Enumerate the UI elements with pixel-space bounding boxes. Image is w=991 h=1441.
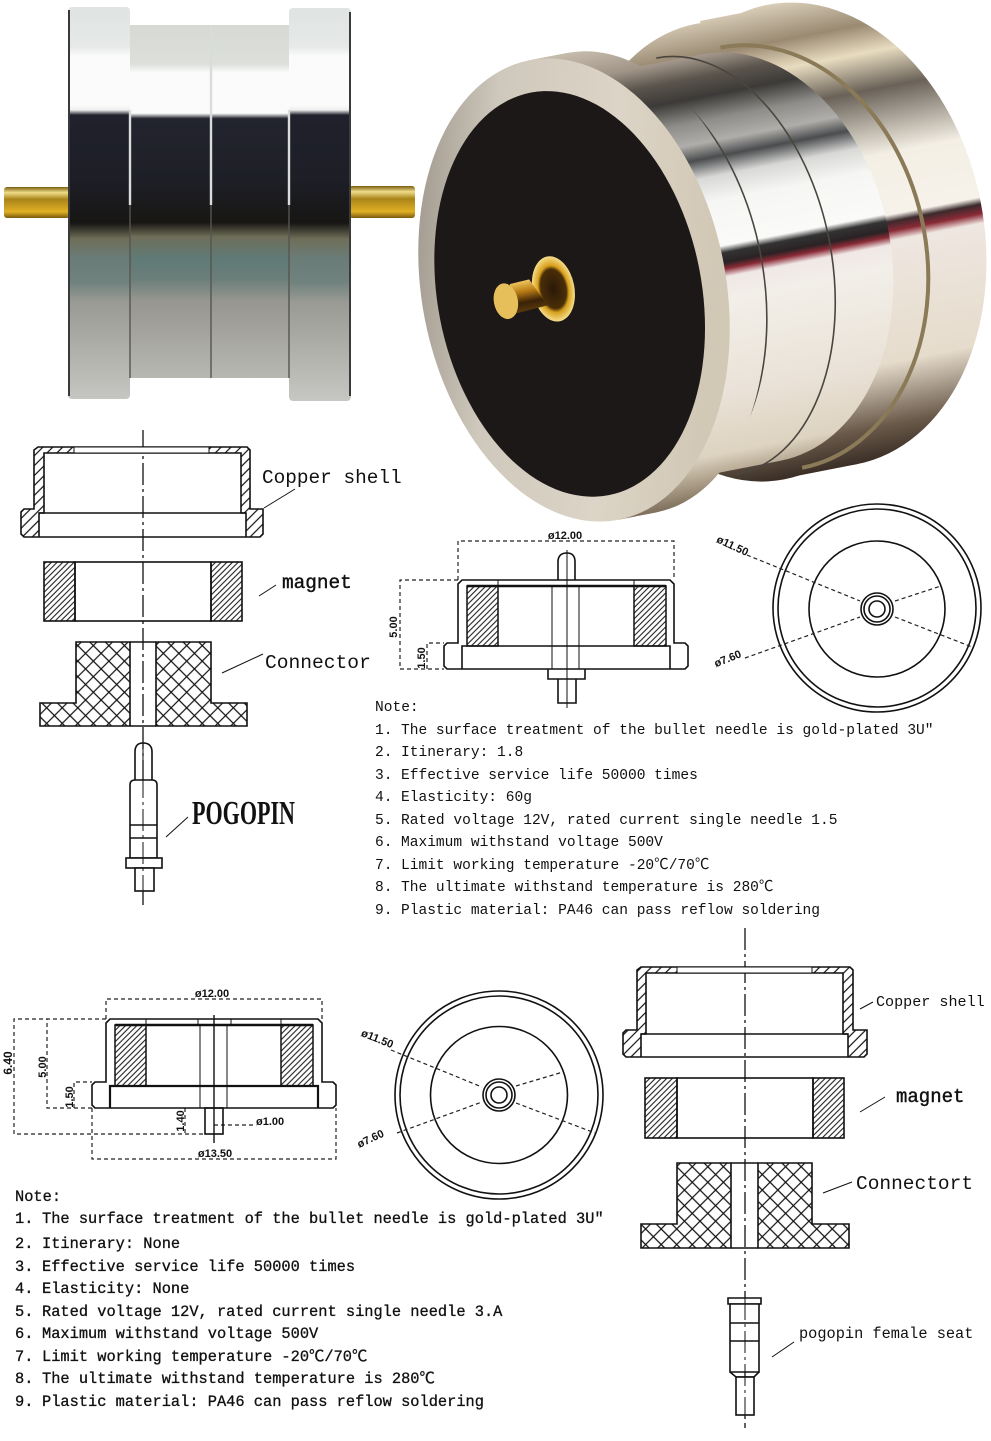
exploded view: female assembly (623, 928, 867, 1428)
pin rings (861, 593, 893, 625)
pin base (548, 669, 585, 703)
dimension: 6.40: 6.40 (1, 1051, 15, 1075)
left flange (68, 7, 130, 399)
label: POGOPIN (166, 795, 295, 837)
center line (744, 928, 746, 1428)
notes: male connector: 5. (375, 813, 392, 829)
notes: female connector: Elasticity: None (42, 1280, 189, 1298)
seat (110, 1086, 318, 1108)
outer circle (773, 504, 981, 712)
notes: male connector: Note: (375, 700, 419, 716)
front rim (380, 31, 768, 549)
notes: female connector: Note: (15, 1188, 61, 1206)
rear flange (598, 0, 991, 497)
seams, light part (130, 25, 289, 205)
end view: male connector (713, 504, 981, 712)
gold pin, right (349, 186, 415, 218)
notes: female connector: Itinerary: None (42, 1235, 180, 1253)
black face (401, 67, 738, 520)
dimension: 1.40: 1.40 (175, 1110, 187, 1132)
dimension: height 5.00: 5.00 (388, 616, 400, 638)
dimension lines (14, 999, 336, 1159)
dimension: flange 1.50: 1.50 (416, 647, 428, 669)
connector bore (130, 642, 156, 726)
dimension: 7.60: ø7.60 (355, 1128, 386, 1151)
label: magnet (259, 572, 352, 596)
pin tip (558, 553, 575, 580)
photo: connector side view (4, 7, 415, 401)
middle circle (809, 541, 945, 677)
leader lines (391, 1050, 595, 1133)
dimension: 5.00: 5.00 (37, 1056, 49, 1078)
exploded view: male assembly (21, 430, 263, 905)
right flange (289, 8, 351, 401)
notes: male connector: Effective service life 50000 times (401, 768, 698, 784)
dimension: 7.60: ø7.60 (713, 648, 743, 670)
inner top line (115, 1024, 313, 1026)
photo: connector angled view (378, 0, 991, 549)
notes: female connector: 8. (15, 1370, 33, 1388)
middle barrel (130, 25, 289, 378)
notes: male connector: Maximum withstand voltage 500V (401, 835, 663, 851)
pin shaft (498, 580, 634, 669)
magnet (44, 562, 242, 621)
magnet right (634, 586, 666, 646)
label: magnet (860, 1086, 964, 1112)
section drawing: female connector (1, 988, 336, 1160)
connector (641, 1163, 849, 1248)
label: POGOPIN: POGOPIN (192, 795, 295, 832)
notes: female connector: 7. (15, 1348, 33, 1366)
notes: female connector: Limit working temperature -20℃/70℃ (42, 1348, 367, 1366)
notes: female connector: Plastic material: PA46 can pass reflow soldering (42, 1393, 484, 1411)
notes: female connector: Effective service life 50000 times (42, 1258, 355, 1276)
label: Copper shell: Copper shell (262, 467, 402, 489)
leader lines (745, 555, 972, 658)
notes: female connector: 6. (15, 1325, 33, 1343)
pin axis (566, 550, 568, 708)
dimension: 11.50: ø11.50 (714, 534, 750, 559)
front flange (529, 24, 803, 520)
notes: female connector: 1. (15, 1210, 33, 1228)
pogopin (126, 743, 162, 891)
notes: female connector: The ultimate withstand temperature is 280℃ (42, 1370, 435, 1388)
magnet (645, 1078, 844, 1138)
gold ring (527, 253, 580, 325)
pin tip (491, 281, 521, 321)
notes: male connector: 4. (375, 790, 392, 806)
label: pogopin female seat: pogopin female seat (799, 1325, 973, 1343)
notes: female connector: Maximum withstand voltage 500V (42, 1325, 319, 1343)
outer inner circle (400, 996, 598, 1194)
magnet right (281, 1025, 313, 1086)
notes: female connector: The surface treatment of the bullet needle is gold-plated 3U″ (42, 1210, 604, 1228)
label: Connectort: Connectort (856, 1173, 973, 1195)
center line (142, 430, 144, 905)
notes: male connector: The surface treatment of the bullet needle is gold-plated 3U″ (401, 723, 934, 739)
notes: male connector: Limit working temperature -20℃/70℃ (401, 857, 709, 874)
notes: male connector: 7. (375, 858, 392, 874)
notes: male connector: 2. (375, 745, 392, 761)
notes: female connector: 4. (15, 1280, 33, 1298)
seams, dark part (130, 205, 289, 378)
notes: female connector: 5. (15, 1303, 33, 1321)
dimension: 11.50: ø11.50 (359, 1027, 395, 1051)
outer circle (395, 991, 603, 1199)
center rings (483, 1079, 515, 1111)
notes: female connector: Rated voltage 12V, rated current single needle 3.A (42, 1303, 503, 1321)
center line on pin (142, 743, 144, 905)
connector (40, 642, 247, 726)
label: Connector: Connector (265, 652, 371, 674)
magnet left (467, 586, 498, 646)
dimension: 1.50: 1.50 (64, 1086, 76, 1108)
pogopin female seat (728, 1298, 761, 1415)
shaft (146, 1019, 281, 1108)
internal lines (467, 585, 666, 587)
notes: male connector: Plastic material: PA46 can pass reflow soldering (401, 903, 820, 919)
notes: male connector: Itinerary: 1.8 (401, 745, 523, 761)
notes: male connector: The ultimate withstand temperature is 280℃ (401, 879, 773, 896)
notes: female connector (15, 1188, 604, 1411)
notes: male connector: 9. (375, 903, 392, 919)
tail (205, 1108, 223, 1134)
notes: female connector: 3. (15, 1258, 33, 1276)
middle circle (430, 1026, 568, 1164)
dimension: 12.00: ø12.00 (195, 988, 229, 1000)
notes: male connector: Elasticity: 60g (401, 790, 532, 806)
outer inner circle (778, 509, 976, 707)
axis (213, 1015, 215, 1143)
label: Copper shell: Copper shell (876, 993, 985, 1011)
notes: male connector: 1. (375, 723, 392, 739)
shell outline (444, 580, 688, 669)
outer edges (69, 10, 350, 396)
barrel seams (592, 30, 870, 489)
gold pin, left (4, 187, 70, 218)
label: Copper shell (262, 467, 402, 508)
section drawing: male connector (388, 530, 688, 708)
rear groove (720, 16, 964, 468)
notes: male connector: 6. (375, 835, 392, 851)
connector bore (731, 1163, 758, 1248)
label: magnet: magnet (282, 572, 352, 594)
label: pogopin female seat (772, 1325, 973, 1357)
shell outline (92, 1019, 336, 1108)
notes: male connector: 8. (375, 880, 392, 896)
notes: male connector: 3. (375, 768, 392, 784)
notes: male connector (375, 700, 934, 919)
end view: female connector (355, 991, 603, 1199)
rear shoulder (533, 0, 946, 511)
dimension: 1.00: ø1.00 (256, 1116, 284, 1128)
barrel (574, 26, 928, 486)
copper shell (623, 967, 867, 1057)
copper shell (21, 447, 263, 537)
label: magnet: magnet (896, 1086, 964, 1108)
dimension: diameter 12.00: ø12.00 (548, 530, 582, 542)
magnet left (115, 1025, 146, 1086)
gold pin (510, 277, 548, 314)
center line on seat (744, 1298, 746, 1428)
dimension: 13.50: ø13.50 (198, 1148, 232, 1160)
notes: female connector: 9. (15, 1393, 33, 1411)
notes: female connector: 2. (15, 1235, 33, 1253)
notes: male connector: Rated voltage 12V, rated current single needle 1.5 (401, 813, 837, 829)
dimension lines (400, 541, 674, 669)
seat (462, 646, 670, 669)
